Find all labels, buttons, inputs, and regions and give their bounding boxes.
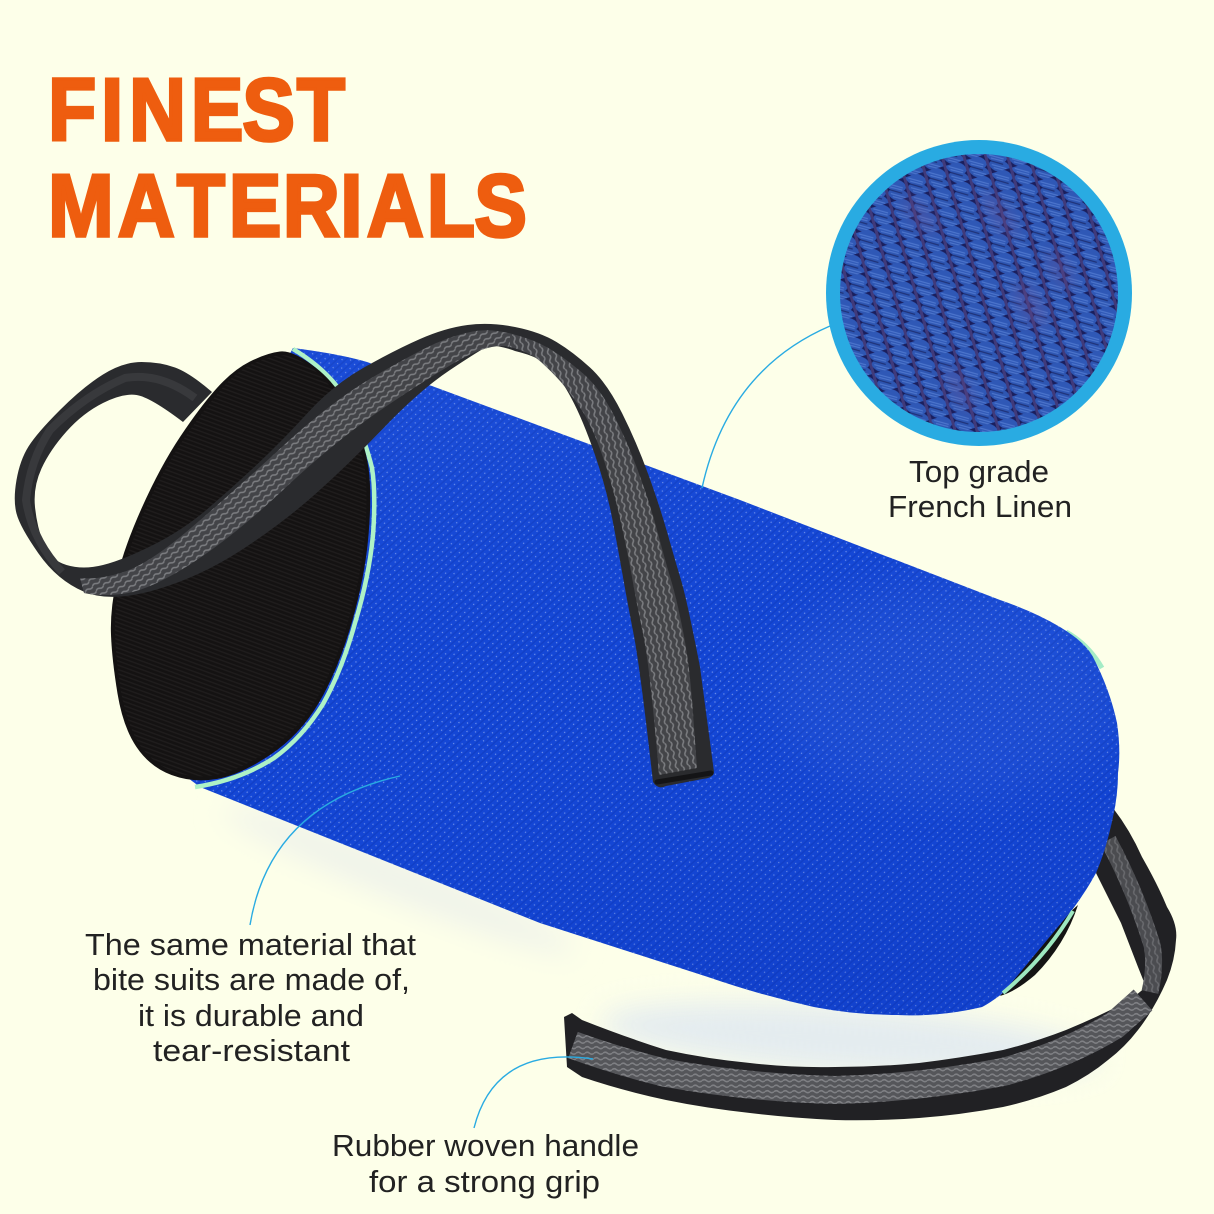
weave on diagonal strap: [80, 330, 512, 595]
title: FINEST: [48, 61, 345, 159]
caption: handle: for a strong grip: [369, 1164, 600, 1199]
strap end stitching: [657, 773, 711, 782]
caption: linen: Top grade: [909, 454, 1049, 489]
caption: fabric: [85, 927, 416, 1068]
caption: handle: [332, 1128, 639, 1199]
purple thread patches: [904, 194, 1074, 412]
leader line: linen: [702, 326, 830, 488]
strap grey core: [80, 330, 697, 775]
product: cylinder body: [100, 340, 1130, 1020]
weave on descending strap: [510, 334, 697, 775]
caption: linen: French Linen: [888, 489, 1072, 524]
caption: fabric: The same material that: [85, 927, 416, 962]
caption: linen: [888, 454, 1072, 524]
loop grey core: [26, 377, 195, 572]
caption: fabric: it is durable and: [138, 998, 364, 1033]
leader line: fabric: [250, 776, 400, 925]
leader line: handle: [474, 1057, 593, 1128]
main strap with loop: [15, 324, 714, 787]
mint seam, right end: [1003, 911, 1073, 993]
strap outline: [15, 324, 714, 787]
ground shadow: [216, 790, 1102, 1091]
black end sliver, right: [1000, 905, 1078, 996]
magnified linen circle: [826, 140, 1132, 446]
title: [48, 61, 527, 255]
fabric texture: [192, 348, 1120, 1016]
caption: handle: Rubber woven handle: [332, 1128, 639, 1163]
cap texture: [115, 355, 366, 776]
mint seam, right corner: [1066, 632, 1102, 668]
black end cap: [111, 351, 370, 780]
mint seam, cap: [195, 349, 374, 787]
caption: fabric: bite suits are made of,: [93, 962, 410, 997]
blue fabric: [130, 348, 1119, 1015]
caption: fabric: tear-resistant: [153, 1033, 350, 1068]
back strap: right side segment: [564, 808, 1176, 1120]
title: MATERIALS: [48, 157, 527, 255]
